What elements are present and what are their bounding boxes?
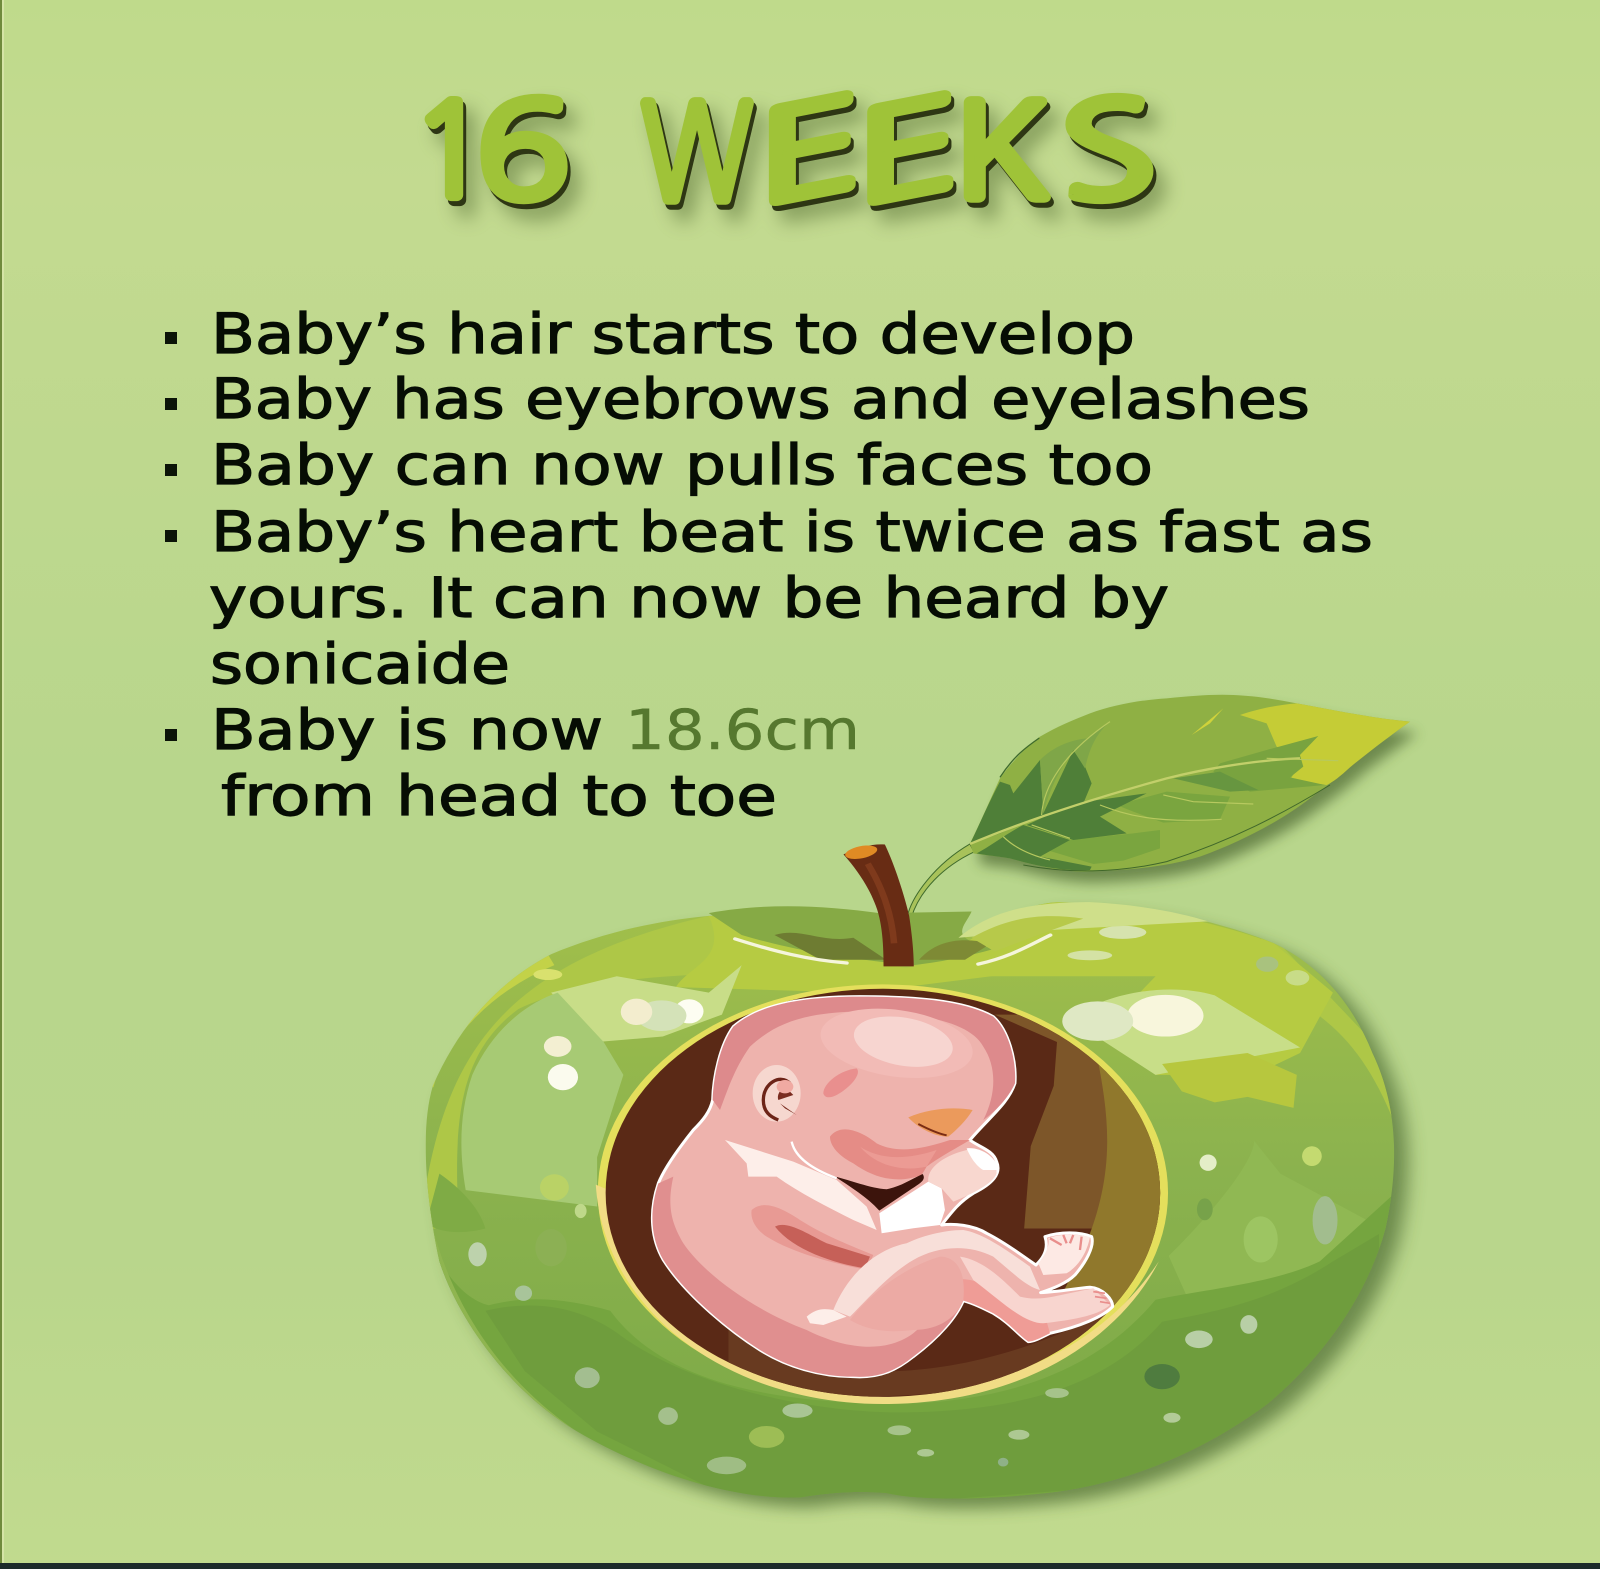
bullet 3: Baby can now pulls faces too: [211, 433, 1153, 498]
fetus shading: [713, 997, 1015, 1120]
apple body: [426, 902, 1394, 1498]
arm and hand: [879, 1148, 998, 1233]
apple spots and highlights: [468, 926, 1338, 1474]
title: 16 WEEKS: 6: [476, 85, 570, 217]
icon: baby fetus: [652, 997, 1113, 1377]
belly fold: [751, 1205, 873, 1270]
bullet 4: yours. It can now be heard by: [209, 566, 1169, 631]
title: 16 WEEKS: S: [1058, 84, 1158, 218]
title: 16 WEEKS: E: [757, 78, 863, 223]
bullet 4: [165, 500, 1373, 697]
bullet 5: Baby is now: [211, 698, 603, 763]
legs: [807, 1230, 1110, 1342]
bullet 4: sonicaide: [210, 632, 510, 697]
icon: leaf: [907, 695, 1410, 920]
title: 16 WEEKS: K: [953, 87, 1049, 217]
bullet 4: Baby’s heart beat is twice as fast as: [211, 500, 1373, 565]
bullet 1: Baby’s hair starts to develop: [211, 302, 1135, 367]
title: 16 WEEKS: W: [641, 88, 753, 220]
eye patch: [908, 1108, 973, 1137]
icon: green apple: [400, 843, 1430, 1514]
bullet 5: from head to toe: [221, 764, 777, 829]
head highlights: [816, 1000, 977, 1087]
bullet 5: 18.6cm: [625, 698, 860, 763]
bullet 2: Baby has eyebrows and eyelashes: [211, 367, 1310, 432]
title: 16 WEEKS: 1: [411, 87, 489, 215]
bullet list: [165, 302, 1373, 829]
apple stem: [843, 843, 914, 966]
apple stem dimple: [709, 902, 1208, 965]
title: 16 WEEKS: [411, 77, 1158, 223]
leaf shadow: [978, 706, 1418, 883]
eyebrow mark: [823, 1068, 858, 1097]
apple shadow: [440, 912, 1408, 1509]
bullet 5: [165, 698, 860, 829]
ear: [753, 1065, 801, 1122]
hole rim: [598, 984, 1168, 1401]
mouth line and shoulder: [792, 1142, 837, 1178]
neck gap: [835, 1174, 924, 1211]
hole interior: [606, 988, 1160, 1397]
title: 16 WEEKS: E: [856, 77, 960, 223]
cheek shading: [830, 1129, 970, 1179]
fetus body: [652, 997, 1113, 1377]
